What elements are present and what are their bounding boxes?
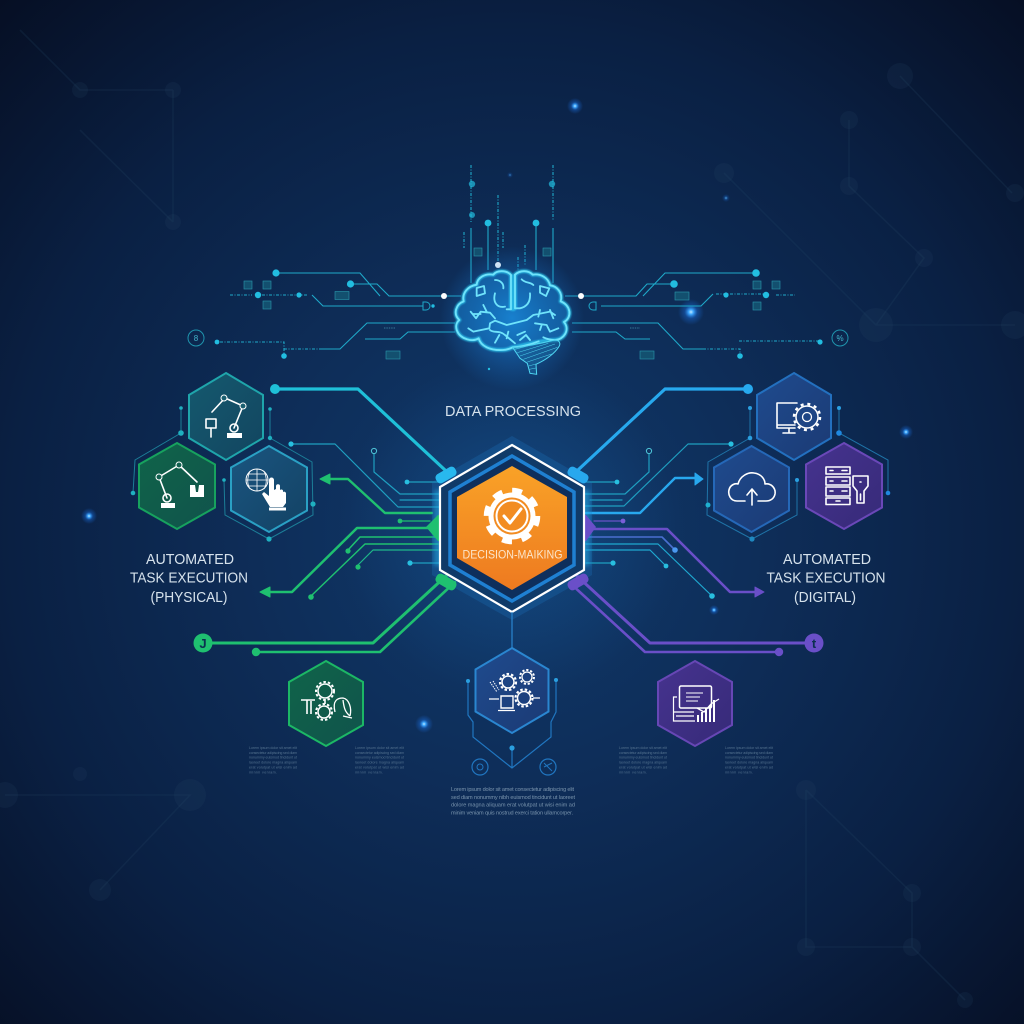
blue hexagon frame	[466, 678, 558, 775]
side glows	[434, 490, 590, 566]
text block: green column one: laoreet dolore magna aliquam	[249, 760, 297, 764]
label: automated task execution physical: TASK EXECUTION	[130, 570, 248, 586]
circuits: data input left of brain	[188, 269, 461, 359]
hexagon: monitor and gear	[757, 373, 831, 460]
text block: purple column one: Lorem ipsum dolor sit amet elit	[619, 746, 667, 750]
icon: globe and hand	[246, 469, 286, 510]
text block: green column two: laoreet dolore magna aliquam	[355, 760, 404, 764]
text block: purple column one: consectetur adipiscing sed diam	[619, 751, 667, 755]
circuits: data input right of brain	[565, 269, 848, 359]
text block: purple column two: erat volutpat ut wisi enim ad	[725, 766, 773, 770]
text block: green column one: nonummy euismod tincidunt ut	[249, 756, 297, 760]
text block: purple column one: nonummy euismod tincidunt ut	[619, 756, 667, 760]
icon: gears and tools	[301, 682, 352, 720]
text block: purple column two: nonummy euismod tincidunt ut	[725, 756, 773, 760]
label: automated task execution digital: AUTOMATED	[783, 552, 871, 568]
icon: reports and bar chart	[674, 686, 719, 722]
text block: green column one: consectetur adipiscing sed diam	[249, 751, 297, 755]
label: automated task execution digital	[766, 552, 886, 606]
text block: centre description	[451, 787, 575, 816]
centre hexagon: decision-making	[426, 436, 596, 620]
icon: cloud	[729, 473, 775, 505]
physical hex cluster frame	[131, 406, 316, 542]
text block: green column one	[249, 746, 297, 774]
hexagon: robot arm with box	[189, 373, 263, 460]
left terminal icon	[194, 634, 212, 652]
central glow	[342, 358, 682, 698]
text block: purple column one: laoreet dolore magna aliquam	[619, 760, 667, 764]
right terminal icon: t	[812, 636, 817, 651]
text block: centre description: minim veniam quis nostrud exerci tation ullamcorper.	[451, 810, 573, 816]
icon: robot gripper	[156, 462, 204, 508]
text block: centre description: Lorem ipsum dolor sit amet consectetur adipiscing elit	[451, 787, 574, 793]
icon: glowing brain	[440, 246, 584, 390]
text block: green column two: nonummy euismod tincidunt ut	[355, 756, 404, 760]
text block: purple column two: Lorem ipsum dolor sit amet elit	[725, 746, 773, 750]
glowing particles	[81, 98, 913, 733]
circuits: data input right of brain: %	[836, 334, 844, 343]
text block: green column one: erat volutpat ut wisi enim ad	[249, 766, 297, 770]
heading: data processing: DATA PROCESSING	[445, 404, 581, 420]
hexagon: green tools	[289, 661, 363, 746]
label: automated task execution digital: (DIGITAL)	[794, 590, 856, 606]
text block: purple column two: minim veniam.	[725, 770, 753, 774]
hexagon: robot arm with cup	[139, 443, 215, 529]
icon: gear with check	[487, 491, 537, 541]
icon: monitor with gear	[777, 403, 820, 433]
text block: purple column one	[619, 746, 667, 774]
hexagon: purple reports	[658, 661, 732, 746]
text block: green column two: erat volutpat ut wisi enim ad	[355, 766, 404, 770]
digital hex cluster frame	[706, 406, 890, 542]
hexagon: servers	[806, 443, 882, 529]
left connection lines	[212, 384, 455, 656]
connector blobs	[426, 465, 596, 592]
circuits: data input left of brain: 8	[194, 334, 199, 343]
text block: green column two: consectetur adipiscing sed diam	[355, 751, 404, 755]
text block: green column one: minim veniam.	[249, 770, 277, 774]
icon: robot arm	[206, 395, 246, 438]
icon: gears and laptop	[489, 670, 540, 710]
label: automated task execution physical	[130, 552, 248, 606]
text block: green column two	[355, 746, 404, 774]
text block: purple column two	[725, 746, 773, 774]
circuits: data input top of brain	[464, 165, 555, 283]
text block: centre description: dolore magna aliquam erat volutpat ut wisi enim ad	[451, 802, 575, 808]
text block: purple column two: laoreet dolore magna aliquam	[725, 760, 773, 764]
label: automated task execution physical: (PHYSICAL)	[150, 590, 228, 606]
hexagon: cloud upload	[714, 446, 789, 532]
text block: green column one: Lorem ipsum dolor sit amet elit	[249, 746, 297, 750]
left terminal icon: J	[199, 636, 207, 651]
text block: purple column one: minim veniam.	[619, 770, 647, 774]
text block: purple column one: erat volutpat ut wisi enim ad	[619, 766, 667, 770]
centre hexagon: decision-making: DECISION-MAIKING	[462, 548, 562, 562]
hexagon: blue process	[476, 648, 548, 733]
right connection lines	[570, 384, 810, 656]
text block: centre description: sed diam nonummy nibh euismod tincidunt ut laoreet	[451, 795, 575, 801]
text block: green column two: Lorem ipsum dolor sit amet elit	[355, 746, 404, 750]
icon: server rack and device	[826, 467, 868, 504]
text block: green column two: minim veniam.	[355, 770, 383, 774]
right terminal icon	[804, 634, 824, 652]
label: automated task execution physical: AUTOMATED	[146, 552, 234, 568]
connector to lower hexagon	[511, 612, 513, 648]
text block: purple column two: consectetur adipiscing sed diam	[725, 751, 773, 755]
hexagon: touch and globe	[231, 446, 307, 532]
label: automated task execution digital: TASK EXECUTION	[766, 570, 886, 586]
